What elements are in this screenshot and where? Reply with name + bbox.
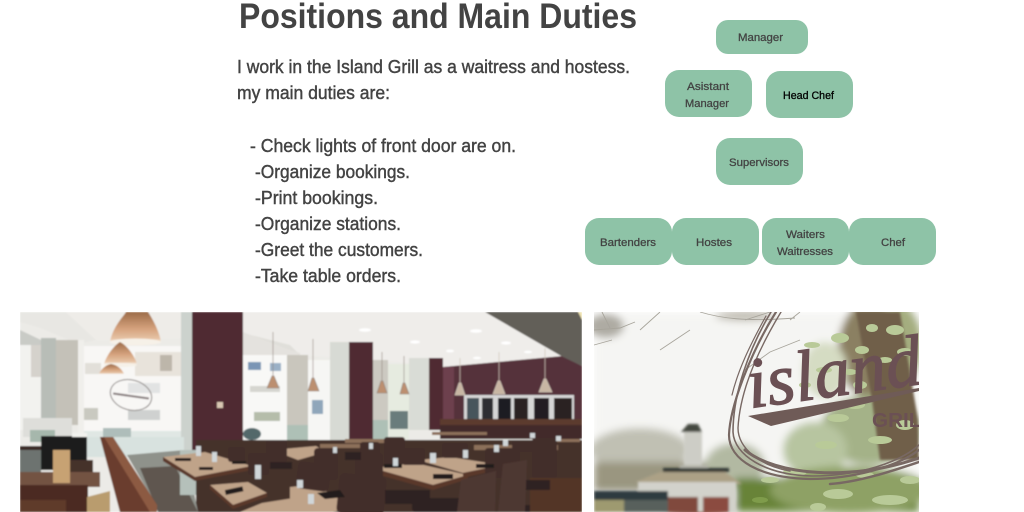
wine display <box>464 395 574 422</box>
photo: restaurant interior <box>20 312 582 512</box>
box: assistant manager: Asistant <box>687 81 729 93</box>
blurred background <box>588 302 930 512</box>
central pillar <box>181 312 193 450</box>
box: hostes <box>672 218 759 265</box>
box: bartenders <box>585 218 672 265</box>
text block: duties list: -Organize stations. <box>255 214 401 234</box>
box: bartenders: Bartenders <box>600 237 657 249</box>
box: manager <box>716 20 808 54</box>
logo swirl <box>729 312 919 484</box>
copper lamps <box>110 312 161 342</box>
window base and stairs <box>84 437 184 457</box>
box: hostes: Hostes <box>696 237 733 249</box>
bare branches <box>594 312 800 370</box>
second window <box>308 360 330 442</box>
logo swash <box>748 388 919 426</box>
box: head chef <box>766 71 853 118</box>
box: manager: Manager <box>738 32 783 44</box>
box: waiters and waitresses: Waiters <box>786 229 826 241</box>
right window <box>244 353 250 354</box>
foliage <box>752 324 920 511</box>
downlights <box>359 328 532 359</box>
third pillar <box>409 358 429 430</box>
second pillar <box>330 342 349 442</box>
text block: duties list: -Print bookings. <box>255 188 378 208</box>
chairs <box>228 437 557 512</box>
tree trunk <box>856 312 919 460</box>
box: head chef: Head Chef <box>783 90 835 102</box>
left counter and furniture <box>23 418 72 437</box>
table tops under chairs <box>163 446 502 512</box>
text block: duties list <box>250 136 516 286</box>
text block: introduction: I work in the Island Grill as a waitress and hostess. <box>237 57 630 77</box>
organisation chart <box>585 20 936 265</box>
box: chef: Chef <box>881 237 906 249</box>
box: supervisors <box>716 138 803 185</box>
box: assistant manager <box>665 70 752 117</box>
left windows and walls <box>20 345 41 430</box>
photo: island grill window logo <box>594 312 919 512</box>
floor and banquette <box>196 440 582 512</box>
text block: introduction <box>237 57 630 103</box>
logo wordmark: island <box>741 320 928 424</box>
far table tops <box>320 432 580 450</box>
text block: duties list: -Take table orders. <box>255 266 401 286</box>
glasses <box>196 433 561 504</box>
text block: duties list: -Greet the customers. <box>255 240 423 260</box>
text block: duties list: - Check lights of front door are on. <box>250 136 516 156</box>
logo subtitle: GRILL <box>872 410 934 432</box>
third window <box>373 360 388 425</box>
box: waiters and waitresses <box>762 218 849 265</box>
box: waiters and waitresses: Waitresses <box>777 246 834 258</box>
box: supervisors: Supervisors <box>729 157 790 169</box>
box: assistant manager: Manager <box>685 98 729 110</box>
text block: introduction: my main duties are: <box>237 83 390 103</box>
box: chef <box>849 218 936 265</box>
back wall and dark soffit <box>443 356 582 425</box>
tower and pavilion <box>594 424 742 512</box>
text block: duties list: -Organize bookings. <box>255 162 410 182</box>
place settings <box>175 458 494 499</box>
small pendant lamps <box>267 332 409 394</box>
